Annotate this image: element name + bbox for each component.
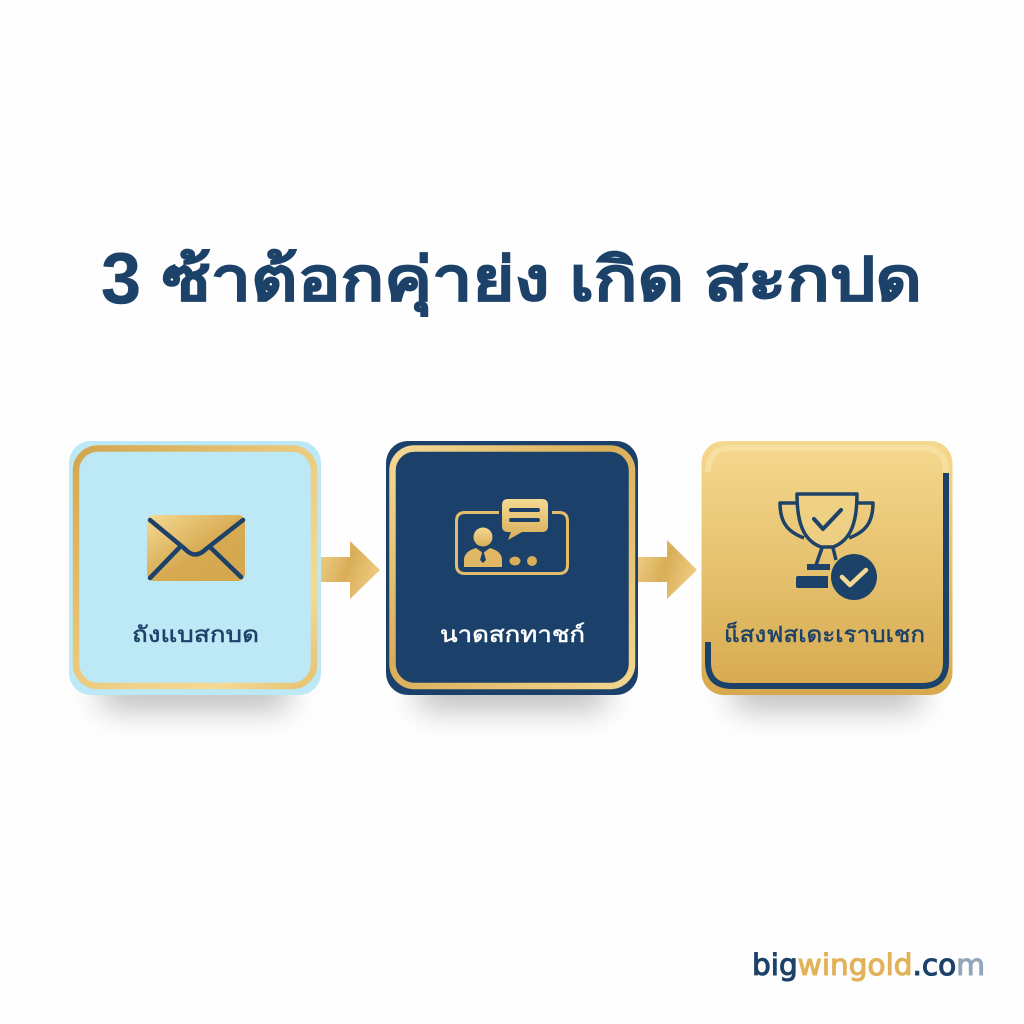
title [101,239,922,319]
icon: video call with speech bubble [456,499,568,574]
logo: bigwingold.com: bigwingold.com [752,948,985,982]
panel: step 3 trophy [702,441,952,710]
arrow: step 1 to step 2 [321,541,380,599]
icon: trophy with check badge [780,494,877,600]
panel: step 2 interview [386,441,638,710]
label: step 1: ถังแบสกบด [132,622,259,647]
panel: step 1 envelope [69,441,321,710]
title: ซ้าต้อกคุ่าย่ง เกิด สะกปด [162,246,922,317]
title: 3 [101,239,141,319]
label: step 3: แ็สงฟสเดะเราบเชก [724,620,925,647]
icon: envelope [147,515,245,581]
label: step 2: นาดสกทาชก์ [440,622,585,647]
arrow: step 2 to step 3 [638,540,697,599]
